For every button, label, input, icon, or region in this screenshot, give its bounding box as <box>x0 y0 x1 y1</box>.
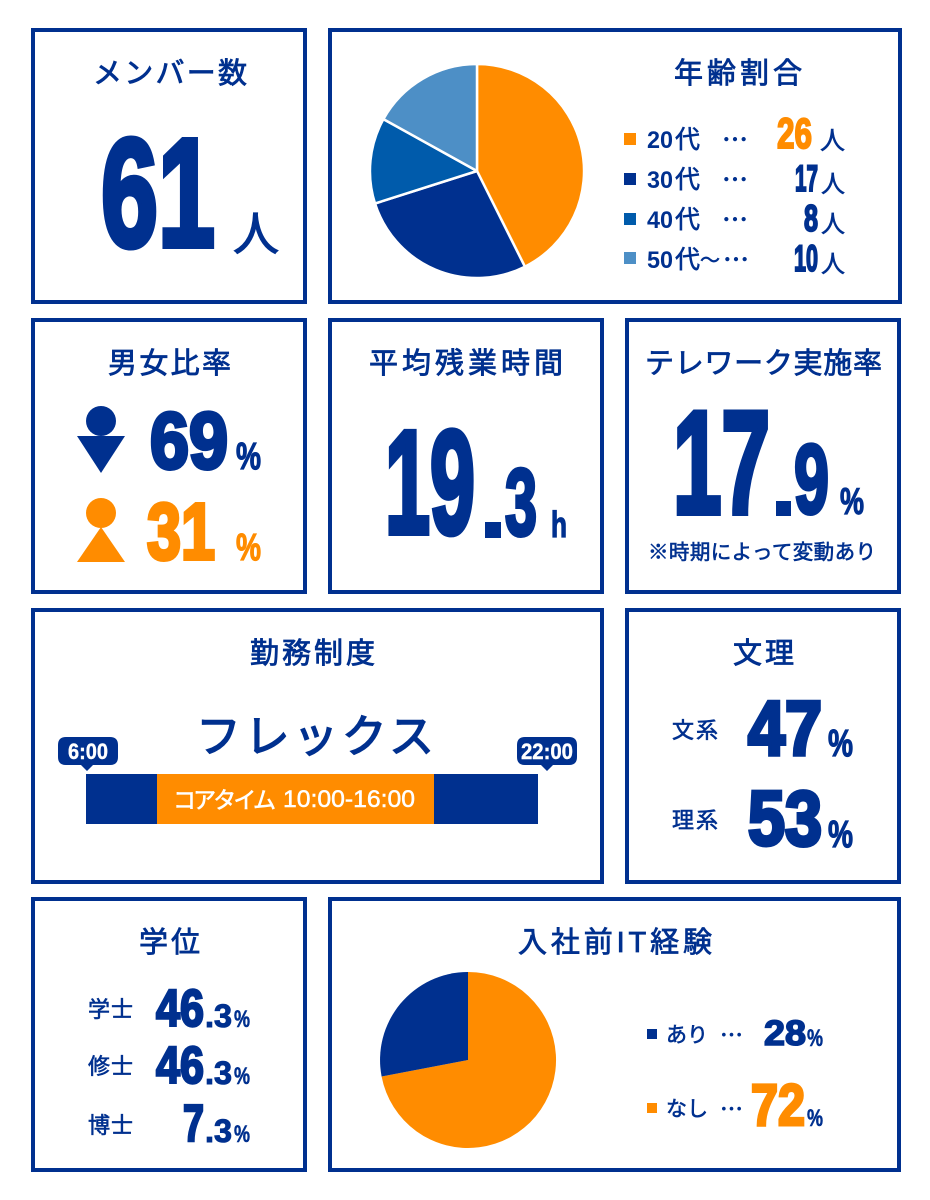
panel: age ratio <box>330 30 900 302</box>
legend: age ratio: 人 <box>821 251 845 278</box>
note: ※時期によって変動あり <box>648 541 876 564</box>
row: doctor: 博士 <box>88 1113 133 1138</box>
row: science: 53 <box>748 776 822 862</box>
legend: yes: あり <box>666 1024 708 1047</box>
icon: male <box>77 406 125 473</box>
row: humanities: % <box>828 723 853 765</box>
value: 17.9%: 17 <box>673 381 770 544</box>
legend: yes: % <box>807 1025 823 1052</box>
panel: degree <box>33 899 305 1170</box>
legend: age ratio: … <box>723 240 749 277</box>
heading: average overtime: 平均残業時間 <box>369 347 563 380</box>
row: master: 修士 <box>88 1054 133 1079</box>
value: 69%: % <box>236 436 261 478</box>
row: master <box>88 1037 250 1095</box>
legend: age ratio: … <box>722 200 748 237</box>
row: humanities <box>672 686 853 772</box>
row: master: % <box>234 1063 250 1090</box>
panel: member count <box>33 30 305 302</box>
legend: age ratio: 代 <box>675 246 700 274</box>
row: doctor: % <box>234 1121 250 1148</box>
row: doctor <box>88 1095 250 1153</box>
row: bachelor: 学士 <box>88 997 133 1022</box>
panel: work system <box>33 610 602 882</box>
legend: age ratio: 8 <box>804 198 818 239</box>
legend: no <box>647 1073 823 1138</box>
heading: gender ratio: 男女比率 <box>108 347 231 380</box>
legend: no: なし <box>666 1098 708 1121</box>
row: doctor: 7 <box>183 1095 204 1153</box>
panel: telework rate <box>627 320 899 592</box>
legend: age ratio: 10 <box>794 238 818 279</box>
legend: age ratio: 40 <box>647 207 673 234</box>
row: doctor: .3 <box>205 1113 232 1149</box>
callout: 22:00 <box>517 737 577 771</box>
row: humanities: 文系 <box>672 718 718 743</box>
value: 31%: 31 <box>147 487 215 576</box>
timeline bar <box>86 774 538 824</box>
value: 17.9%: % <box>840 481 864 522</box>
legend: age ratio: 代 <box>675 206 700 234</box>
legend: yes: … <box>720 1016 743 1050</box>
value: 19.3h: 19 <box>385 401 475 565</box>
legend: no: … <box>720 1090 743 1124</box>
legend: age ratio <box>624 110 845 279</box>
legend: age ratio: … <box>722 120 748 157</box>
heading: humanities and science: 文理 <box>733 637 794 670</box>
label: flex: フレックス <box>196 711 434 762</box>
heading: member count: メンバー数 <box>93 57 247 90</box>
row: science: % <box>828 814 853 856</box>
legend: age ratio: 代 <box>675 126 700 154</box>
legend: age ratio: 人 <box>821 211 845 238</box>
timeline bar: 10:00-16:00 <box>283 786 415 813</box>
legend: no: 72 <box>751 1073 805 1138</box>
panel: average overtime <box>330 320 602 592</box>
row: humanities: 47 <box>748 686 822 772</box>
callout: 6:00: 6:00 <box>68 739 108 764</box>
timeline bar: コアタイム <box>173 787 276 813</box>
callout: 22:00: 22:00 <box>521 739 573 764</box>
legend: no: % <box>807 1105 823 1132</box>
value: 17.9%: 9 <box>794 424 829 534</box>
row: master: 46 <box>156 1037 204 1095</box>
callout: 6:00 <box>58 737 118 771</box>
legend: age ratio: 50 <box>647 247 673 274</box>
pie chart: IT experience <box>380 972 556 1148</box>
value: 19.3h: 3 <box>505 450 537 556</box>
row: bachelor <box>88 980 250 1038</box>
legend: yes <box>647 1014 823 1053</box>
heading: work system: 勤務制度 <box>250 637 375 670</box>
panel: IT experience <box>330 899 899 1170</box>
value: 19.3h: h <box>551 504 567 545</box>
pie chart: age ratio <box>370 64 584 278</box>
value: 31%: % <box>236 527 261 569</box>
row: bachelor: .3 <box>205 998 232 1034</box>
row: science <box>672 776 853 862</box>
legend: age ratio: 30 <box>647 167 673 194</box>
row: science: 理系 <box>672 808 718 833</box>
legend: age ratio: 人 <box>821 171 845 198</box>
row: bachelor: 46 <box>156 980 204 1038</box>
icon: female <box>77 498 125 562</box>
heading: degree: 学位 <box>139 926 200 959</box>
unit: people: 人 <box>233 208 279 260</box>
row: bachelor: % <box>234 1006 250 1033</box>
legend: age ratio: 17 <box>795 158 818 199</box>
value: 69%: 69 <box>150 396 228 485</box>
legend: age ratio: … <box>722 160 748 197</box>
heading: age ratio: 年齢割合 <box>674 57 802 90</box>
legend: age ratio: ～ <box>700 250 720 272</box>
legend: age ratio: 20 <box>647 127 673 154</box>
legend: age ratio: 人 <box>820 127 845 155</box>
panel: gender ratio <box>33 320 305 592</box>
panel: humanities and science <box>627 610 899 882</box>
legend: age ratio: 26 <box>777 110 812 158</box>
legend: age ratio: 代 <box>675 166 700 194</box>
heading: telework rate: テレワーク実施率 <box>645 347 882 380</box>
value: 61: 61 <box>101 107 215 279</box>
heading: IT experience: 入社前IT経験 <box>518 926 712 959</box>
row: master: .3 <box>205 1055 232 1091</box>
legend: yes: 28 <box>764 1014 806 1053</box>
